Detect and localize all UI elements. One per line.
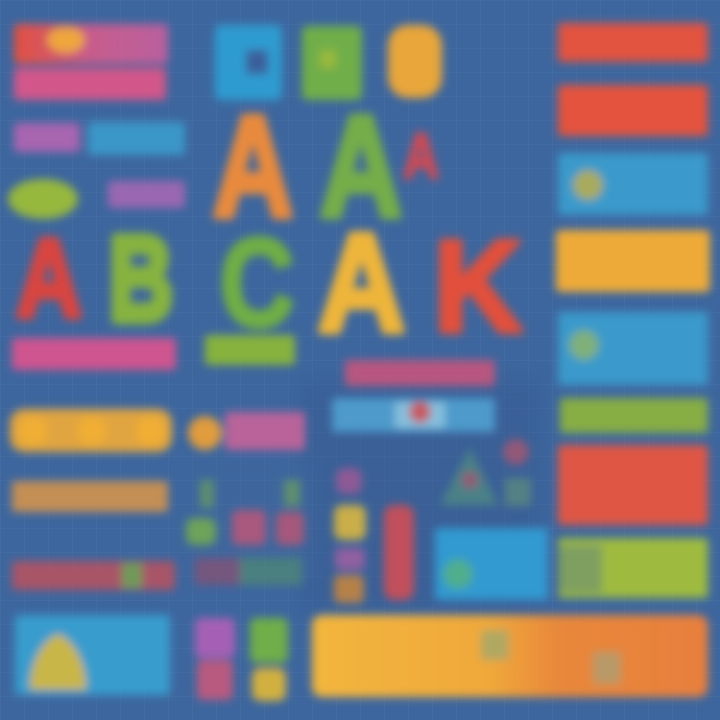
icon: green tile [302,26,362,100]
panel: centre blue card [435,528,548,600]
icons: small green and pink figures [186,480,304,545]
bar: green pill and purple label row [8,179,185,219]
panel: top-left header block [14,24,168,100]
icons: triangle figures [440,439,531,506]
icon: purple column [195,618,235,700]
icon: orange circle [188,416,222,450]
bar: dim green and red caption [195,558,302,585]
icons: stacked figures [334,468,414,603]
letter: orange A: A [213,86,293,247]
icon: orange tile [388,25,442,98]
panel: right red card [558,445,708,525]
bar: blue and white strip [332,398,495,432]
bar: pink caption [12,338,176,370]
letter: green C: C [220,214,294,353]
text block: pink heading [345,360,495,386]
bar: orange caption [12,481,168,512]
panel: right green card [558,538,708,598]
panel: right blue card two [558,312,708,385]
bar: dim red caption [12,561,175,590]
letter: small red A: A [403,120,439,192]
bar: green caption [205,335,295,365]
panel: right red-orange bar [558,85,708,136]
bar: purple and blue label row [14,122,185,155]
letter: red A: A [16,216,82,341]
panel: right yellow bar [556,230,710,292]
icon: green column [250,618,288,701]
panel: bottom wide orange banner [312,615,708,697]
letter: green A: A [320,86,402,247]
row: yellow circles [10,409,172,452]
icon: blue tile [215,25,282,100]
letter: red-orange K: K [434,213,522,359]
panel: right blue card [558,153,708,215]
bar: purple pink label [225,412,305,450]
letter: yellow A: A [318,204,405,361]
panel: bottom-left blue card [15,615,170,695]
letter: green B: B [109,212,173,346]
panel: right green bar [560,398,708,433]
panel: right red bar [558,23,708,62]
